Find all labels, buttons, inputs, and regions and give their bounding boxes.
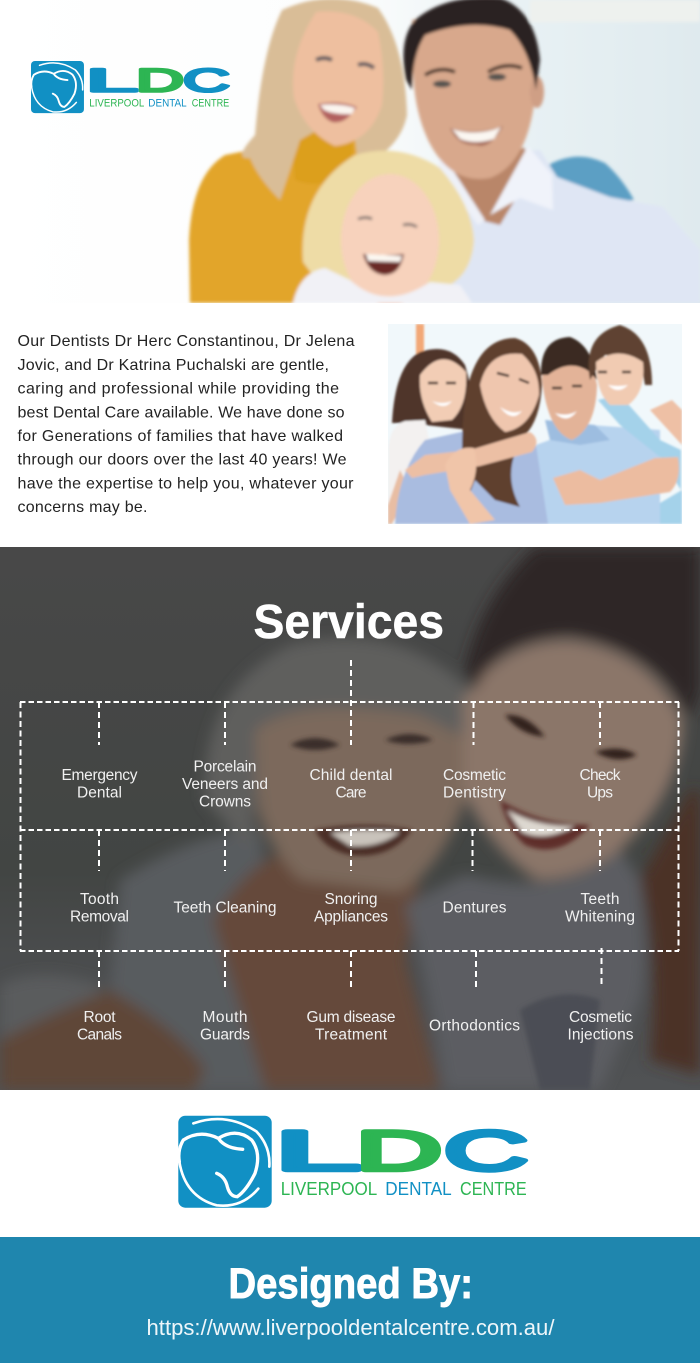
label: Tooth Removal: Tooth bbox=[80, 891, 119, 908]
service labels bbox=[62, 758, 635, 1044]
label: Cosmetic Injections bbox=[568, 1009, 634, 1044]
dashed connector grid bbox=[20, 660, 679, 991]
logo: top left bbox=[31, 61, 230, 113]
logo: top left: LIVERPOOL bbox=[89, 98, 144, 110]
label: Porcelain Veneers and Crowns bbox=[182, 758, 268, 810]
label: Emergency Dental: Dental bbox=[77, 784, 122, 802]
intro paragraph: through our doors over the last 40 years! We bbox=[18, 452, 347, 468]
label: Porcelain Veneers and Crowns: Crowns bbox=[199, 794, 251, 810]
intro paragraph: best Dental Care available. We have done so bbox=[18, 404, 345, 422]
label: Porcelain Veneers and Crowns: Veneers and bbox=[182, 776, 268, 793]
logo: bottom centre: CENTRE bbox=[460, 1178, 527, 1199]
label: Cosmetic Dentistry bbox=[443, 767, 506, 802]
intro paragraph: for Generations of families that have walked bbox=[18, 428, 343, 445]
label: Teeth Whitening: Teeth bbox=[580, 891, 620, 908]
logo: bottom centre: L bbox=[275, 1119, 361, 1182]
label: Emergency Dental bbox=[62, 767, 138, 802]
family photo: four people hugging bbox=[388, 324, 682, 524]
label: Child dental Care bbox=[310, 767, 392, 802]
intro paragraph: Jovic, and Dr Katrina Puchalski are gentle, bbox=[18, 357, 329, 374]
label: Child dental Care: Child dental bbox=[310, 767, 392, 784]
label: Teeth Whitening: Whitening bbox=[565, 908, 635, 926]
label: Tooth Removal: Removal bbox=[70, 908, 129, 926]
label: Child dental Care: Care bbox=[336, 784, 366, 802]
label: Root Canals: Canals bbox=[77, 1026, 122, 1044]
logo: bottom centre: DENTAL bbox=[385, 1178, 452, 1199]
label: Root Canals bbox=[77, 1009, 122, 1044]
heading: Designed By: Designed By: bbox=[228, 1260, 473, 1308]
label: Gum disease Treatment bbox=[306, 1009, 396, 1044]
label: Cosmetic Dentistry: Dentistry bbox=[443, 784, 506, 802]
intro paragraph: Our Dentists Dr Herc Constantinou, Dr Jelena bbox=[18, 333, 355, 350]
label: Root Canals: Root bbox=[84, 1009, 116, 1026]
label: Dentures: Dentures bbox=[442, 900, 507, 916]
label: Mouth Guards bbox=[200, 1009, 250, 1044]
label: Check Ups: Ups bbox=[587, 784, 613, 802]
label: Snoring Appliances: Snoring bbox=[324, 891, 378, 908]
label: Gum disease Treatment: Gum disease bbox=[306, 1009, 396, 1026]
website url: https://www.liverpooldentalcentre.com.au/ bbox=[146, 1315, 555, 1340]
label: Tooth Removal bbox=[70, 891, 129, 926]
intro paragraph: have the expertise to help you, whatever your bbox=[18, 476, 354, 492]
logo: bottom centre: LIVERPOOL bbox=[281, 1178, 377, 1199]
icon: tooth bbox=[31, 61, 84, 113]
label: Teeth Whitening bbox=[565, 891, 635, 926]
label: Snoring Appliances bbox=[314, 891, 388, 926]
label: Cosmetic Injections: Cosmetic bbox=[569, 1009, 632, 1026]
label: Gum disease Treatment: Treatment bbox=[315, 1026, 388, 1044]
heading: Services: Services bbox=[254, 596, 444, 649]
label: Check Ups: Check bbox=[580, 767, 621, 784]
services panel background photo bbox=[0, 547, 700, 1090]
logo: bottom centre: D bbox=[356, 1119, 442, 1182]
intro paragraph bbox=[18, 333, 355, 516]
label: Orthodontics: Orthodontics bbox=[429, 1018, 520, 1034]
icon: tooth large bbox=[178, 1116, 272, 1208]
label: Mouth Guards: Guards bbox=[200, 1026, 250, 1044]
logo: bottom centre bbox=[178, 1116, 528, 1208]
logo: top left: D bbox=[136, 63, 184, 99]
logo: top left: C bbox=[183, 63, 230, 99]
logo: top left: DENTAL bbox=[148, 98, 187, 110]
label: Emergency Dental: Emergency bbox=[62, 767, 138, 784]
logo: top left: CENTRE bbox=[192, 98, 229, 110]
intro paragraph: concerns may be. bbox=[18, 499, 148, 516]
label: Teeth Cleaning: Teeth Cleaning bbox=[174, 900, 276, 916]
intro paragraph: caring and professional while providing the bbox=[18, 380, 339, 398]
label: Porcelain Veneers and Crowns: Porcelain bbox=[194, 758, 256, 776]
label: Check Ups bbox=[580, 767, 621, 802]
label: Cosmetic Dentistry: Cosmetic bbox=[443, 767, 506, 784]
hero photo: smiling family bbox=[186, 0, 700, 303]
label: Cosmetic Injections: Injections bbox=[568, 1026, 634, 1044]
logo: top left: L bbox=[86, 63, 138, 99]
label: Snoring Appliances: Appliances bbox=[314, 908, 388, 926]
label: Mouth Guards: Mouth bbox=[202, 1009, 248, 1026]
logo: bottom centre: C bbox=[444, 1119, 528, 1182]
footer band bbox=[0, 1237, 700, 1363]
